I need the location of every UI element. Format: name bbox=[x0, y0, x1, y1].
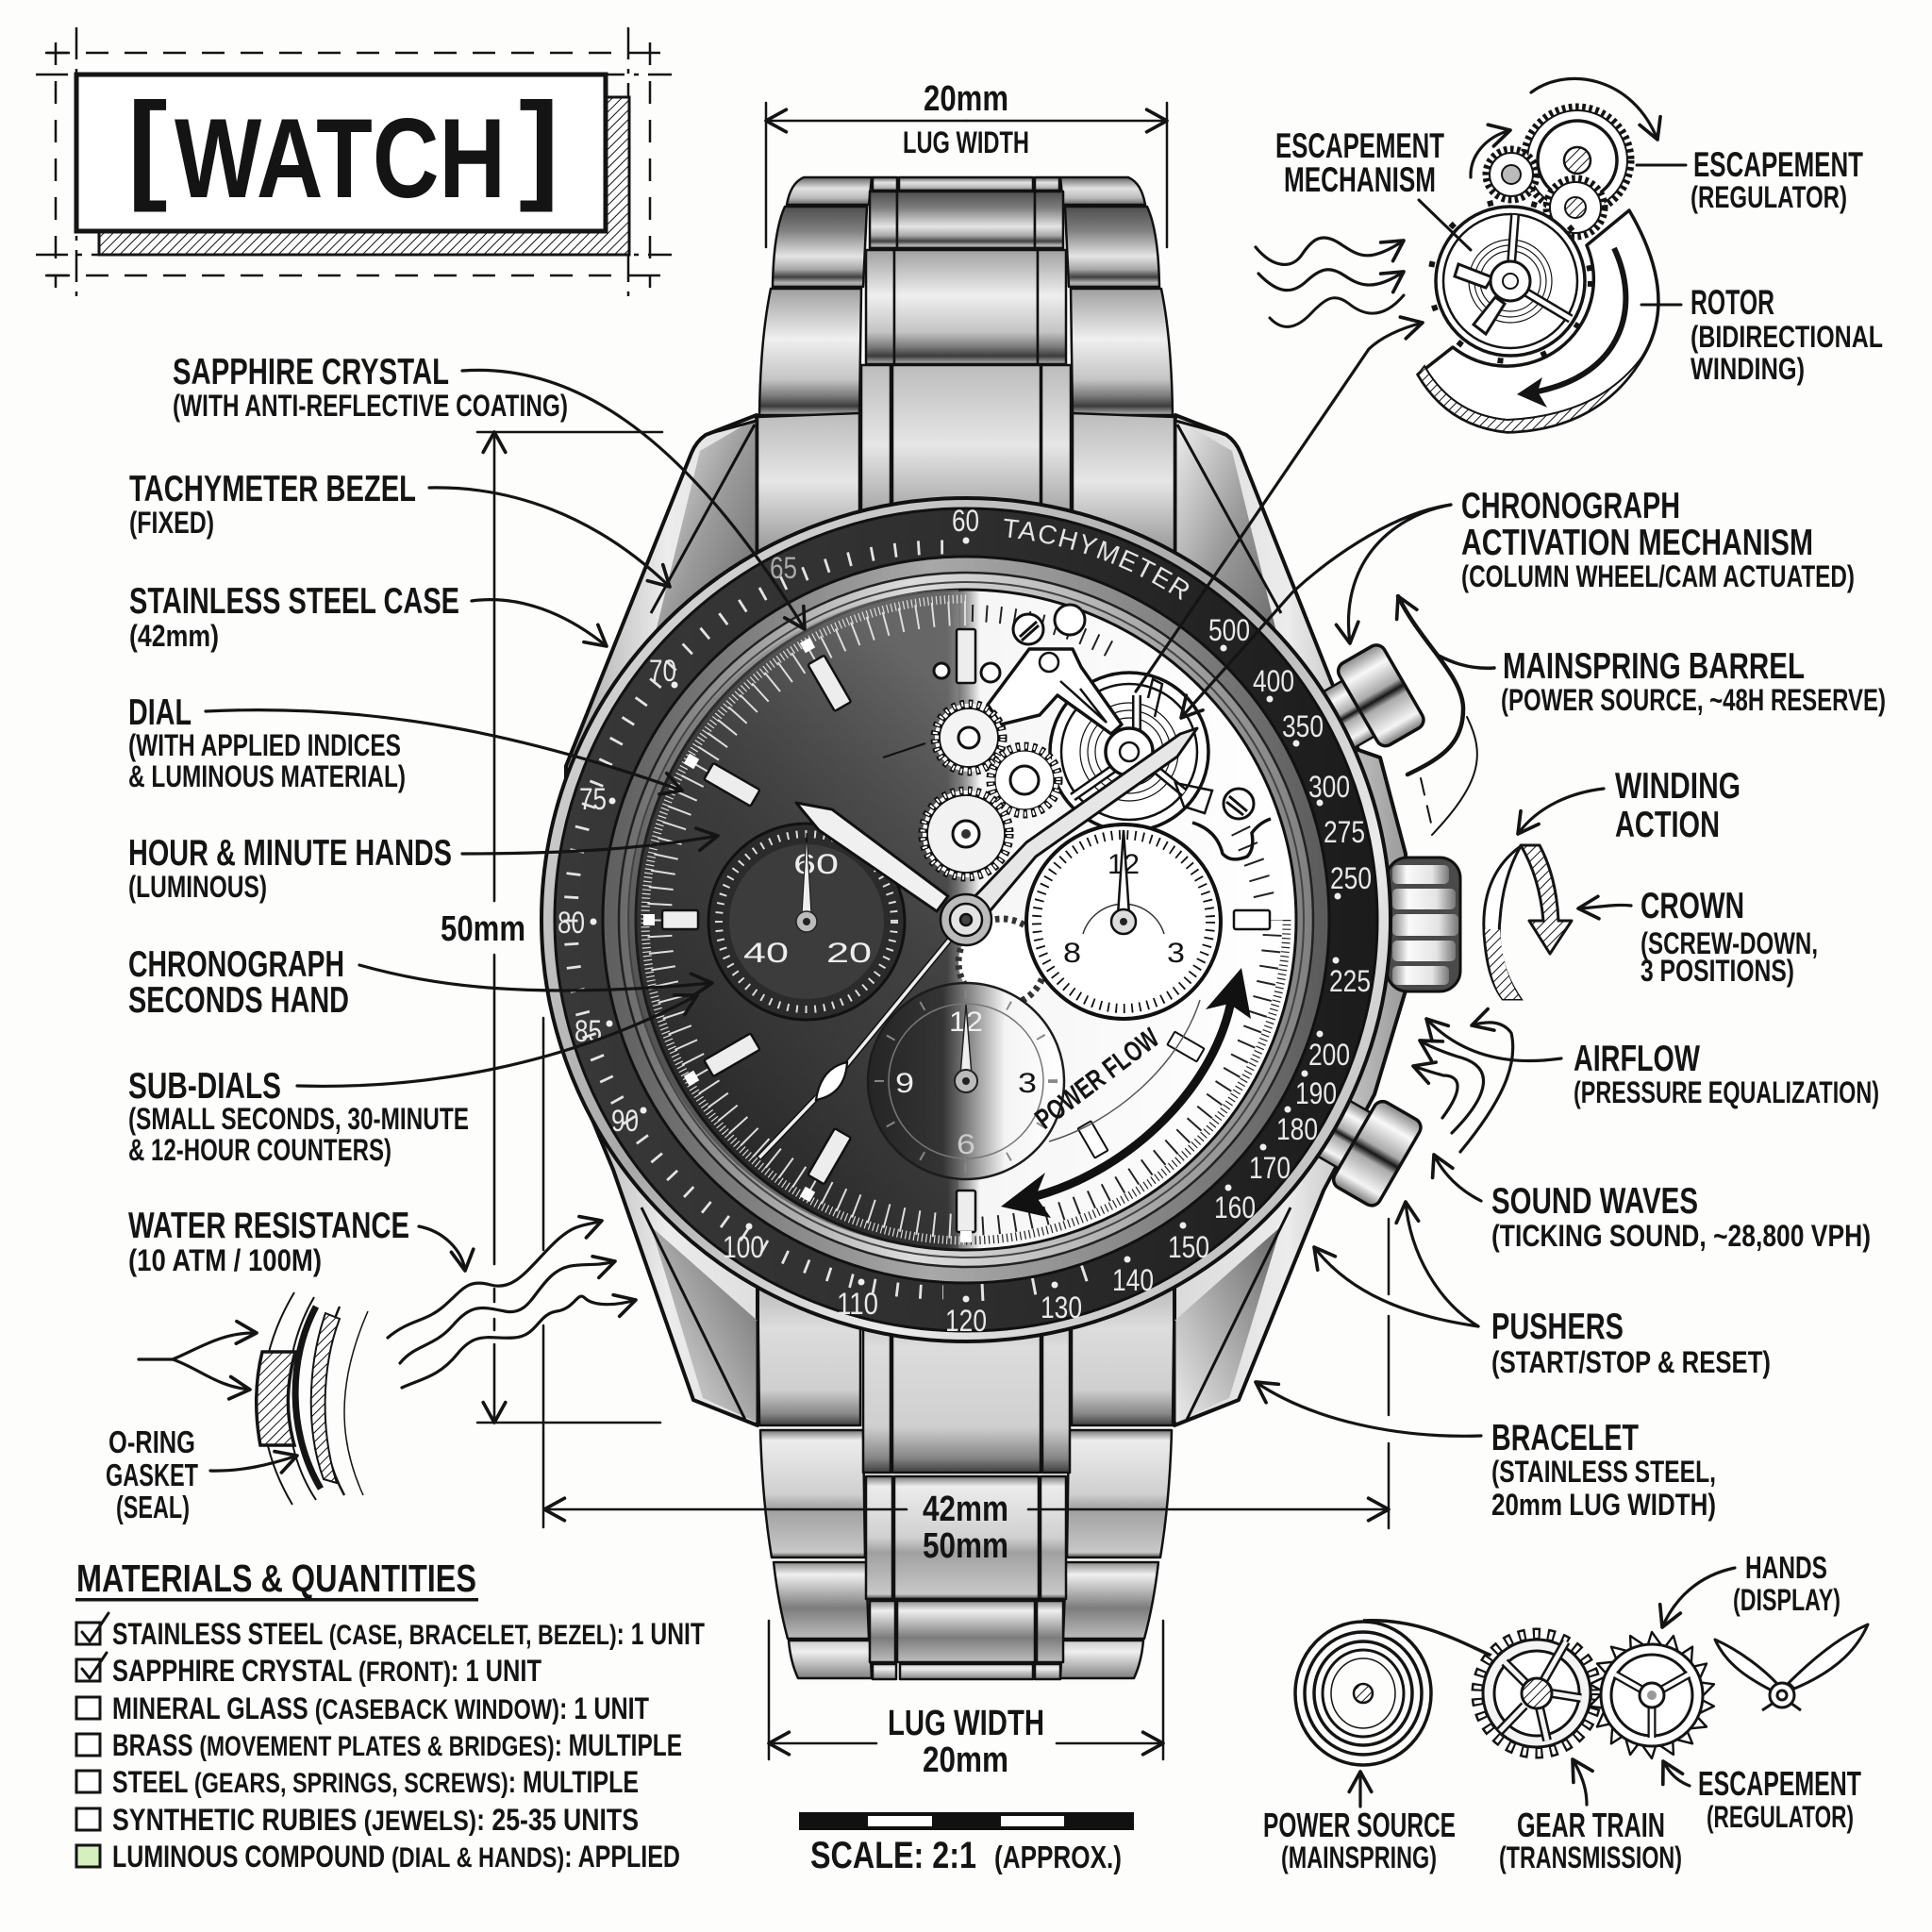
label: rotor: (BIDIRECTIONAL bbox=[1690, 320, 1883, 354]
leader from escapement to dial bbox=[1136, 323, 1423, 691]
dimension: lug width top bbox=[766, 79, 1167, 247]
luminous plots bbox=[643, 638, 972, 1242]
label: airflow bbox=[1413, 1019, 1879, 1152]
bezel word TACHYMETER: TACHYMETER bbox=[1004, 519, 1189, 600]
label: bracelet: BRACELET bbox=[1491, 1418, 1639, 1458]
balance wheel bbox=[1050, 673, 1208, 831]
bezel numbers: 300 bbox=[1308, 770, 1350, 804]
label: gear train bbox=[1499, 1759, 1682, 1874]
bezel black ring bbox=[555, 508, 1377, 1331]
scale label: (APPROX.) bbox=[994, 1840, 1122, 1874]
label: crown: CROWN bbox=[1641, 886, 1744, 926]
gasket cross-section bbox=[139, 1292, 368, 1505]
label: chronograph seconds hand: SECONDS HAND bbox=[128, 980, 349, 1021]
gasket case arcs bbox=[262, 1292, 368, 1505]
label: tachymeter bezel: TACHYMETER BEZEL bbox=[129, 469, 416, 509]
bezel numbers: 80 bbox=[558, 906, 585, 940]
label: crown: (SCREW-DOWN, bbox=[1641, 926, 1818, 960]
checkbox row 6: SYNTHETIC RUBIES (JEWELS): 25-35 UNITS bbox=[112, 1803, 639, 1837]
bezel numbers: 65 bbox=[770, 551, 797, 585]
sub-dial bottom: 12-hour counter: 3 bbox=[1018, 1068, 1037, 1099]
dial minute track bbox=[645, 599, 1287, 1241]
label: bracelet bbox=[1256, 1382, 1716, 1522]
label: pushers: PUSHERS bbox=[1491, 1307, 1624, 1347]
minute hand bbox=[966, 728, 1197, 923]
checkbox row 3: MINERAL GLASS (CASEBACK WINDOW): 1 UNIT bbox=[112, 1691, 649, 1725]
case body with lugs bbox=[566, 415, 1406, 1425]
bezel numbers: 200 bbox=[1308, 1038, 1350, 1072]
dimension: 42mm width bbox=[543, 1018, 1389, 1566]
upper pusher bbox=[1312, 641, 1427, 762]
label: tachymeter bezel bbox=[129, 469, 670, 587]
stainless steel case bbox=[566, 415, 1406, 1425]
bridge detail bbox=[1040, 653, 1212, 813]
label: o-ring gasket: (SEAL) bbox=[116, 1490, 190, 1524]
train gears bbox=[923, 704, 1058, 1006]
label: sapphire crystal: (WITH ANTI-REFLECTIVE COATING) bbox=[173, 389, 568, 423]
sub-dial left: small seconds: 40 bbox=[743, 938, 789, 969]
large gear bbox=[1524, 107, 1631, 214]
dial shade bbox=[628, 590, 958, 1250]
label: escapement mechanism bbox=[1275, 126, 1471, 250]
label: bracelet: 20mm LUG WIDTH) bbox=[1491, 1488, 1716, 1522]
label: water resistance: WATER RESISTANCE bbox=[128, 1206, 409, 1246]
label: mainspring barrel: MAINSPRING BARREL bbox=[1503, 646, 1805, 687]
sub-dial left: small seconds bbox=[708, 824, 905, 1020]
label: power source: POWER SOURCE bbox=[1263, 1806, 1456, 1844]
hour indices bbox=[662, 629, 1270, 1232]
dial hairline bbox=[883, 743, 925, 758]
sub-dial bottom: 12-hour counter: 9 bbox=[895, 1068, 914, 1099]
bezel numbers: 500 bbox=[1208, 613, 1250, 647]
bezel numbers: 170 bbox=[1249, 1151, 1291, 1185]
title box bbox=[76, 75, 606, 231]
screws bbox=[934, 605, 1254, 819]
label: escapement regulator: (REGULATOR) bbox=[1690, 180, 1847, 214]
upper bracelet bbox=[758, 177, 1174, 566]
lower outer links right bbox=[1060, 1264, 1174, 1678]
checkbox row 7: LUMINOUS COMPOUND (DIAL & HANDS): APPLIED bbox=[112, 1840, 680, 1874]
dimension text 42mm: 42mm bbox=[923, 1490, 1008, 1529]
label: escapement mechanism: MECHANISM bbox=[1284, 160, 1436, 199]
bezel numbers: 190 bbox=[1295, 1076, 1337, 1110]
label: power train escapement: (REGULATOR) bbox=[1707, 1800, 1854, 1834]
label: dial: (WITH APPLIED INDICES bbox=[128, 728, 401, 762]
label: hour and minute hands bbox=[128, 833, 718, 904]
bezel numbers: 85 bbox=[575, 1014, 602, 1048]
label: gear train: (TRANSMISSION) bbox=[1499, 1840, 1682, 1874]
label: escapement regulator: ESCAPEMENT bbox=[1693, 145, 1863, 184]
case facet lines bbox=[641, 415, 1291, 1425]
bezel numbers: 160 bbox=[1214, 1191, 1256, 1224]
bezel numbers: 180 bbox=[1276, 1112, 1318, 1146]
lower centre links bbox=[863, 1264, 1070, 1679]
rehaut bbox=[619, 573, 1313, 1267]
label: sub-dials: SUB-DIALS bbox=[128, 1066, 281, 1107]
title text: ] bbox=[519, 78, 559, 213]
dial base with dark and skeleton halves bbox=[636, 590, 1296, 1250]
inner chapter ring bbox=[603, 557, 1329, 1283]
sub-dial left: small seconds: 20 bbox=[826, 938, 872, 969]
label: rotor bbox=[1641, 283, 1883, 386]
sub-dial right: 30-minute counter bbox=[1026, 824, 1221, 1019]
rotor direction arrow bbox=[1517, 248, 1625, 408]
checkbox row 5: STEEL (GEARS, SPRINGS, SCREWS): MULTIPLE bbox=[112, 1765, 639, 1799]
dimension: 50mm height bbox=[441, 432, 662, 1423]
display hands bbox=[1715, 1624, 1868, 1710]
label: chronograph seconds hand: CHRONOGRAPH bbox=[128, 944, 344, 985]
transmission gear bbox=[1477, 1634, 1596, 1753]
bezel tick marks bbox=[571, 547, 1108, 1292]
bezel metal rim bbox=[541, 498, 1391, 1341]
balance wheel bbox=[1430, 201, 1591, 361]
label: chronograph activation mechanism bbox=[1181, 486, 1855, 718]
label: sub-dials bbox=[128, 995, 697, 1167]
sub-dial right: 30-minute counter: 12 bbox=[1108, 849, 1140, 880]
sub-dial bottom: 12-hour counter bbox=[868, 983, 1064, 1179]
bezel numbers: 275 bbox=[1324, 815, 1365, 849]
cock bridge bbox=[988, 649, 1122, 734]
incoming waves bbox=[1256, 238, 1404, 326]
label: chronograph activation mechanism: ACTIVATION MECHANISM bbox=[1461, 523, 1813, 563]
bezel numbers: 140 bbox=[1112, 1263, 1154, 1297]
centre pivot bbox=[941, 894, 991, 945]
label: power source bbox=[1263, 1772, 1456, 1874]
label: winding action bbox=[1518, 766, 1740, 845]
gasket block bbox=[257, 1352, 295, 1445]
label: crown bbox=[1578, 886, 1818, 988]
label: sound waves: SOUND WAVES bbox=[1491, 1181, 1698, 1222]
rotor crescent bbox=[1418, 210, 1658, 432]
motion arrows on gears bbox=[1531, 78, 1657, 140]
sub-dial right: 30-minute counter: 8 bbox=[1063, 938, 1081, 969]
bezel numbers: 70 bbox=[649, 654, 676, 688]
upper right lug facet bbox=[1175, 418, 1281, 651]
bezel numbers bbox=[558, 504, 1372, 1338]
gasket arrows bbox=[139, 1333, 257, 1359]
bezel numbers: 100 bbox=[723, 1230, 764, 1264]
outer links left bbox=[758, 177, 872, 566]
bezel scale dots bbox=[591, 538, 1341, 1302]
label: hour and minute hands: (LUMINOUS) bbox=[128, 870, 267, 904]
label: tachymeter bezel: (FIXED) bbox=[129, 506, 214, 540]
label: o-ring gasket: O-RING bbox=[108, 1424, 195, 1459]
label: sub-dials: (SMALL SECONDS, 30-MINUTE bbox=[128, 1102, 469, 1136]
rotor hatched edge bbox=[1418, 351, 1646, 432]
hands bbox=[759, 728, 1197, 1158]
label: dial: & LUMINOUS MATERIAL) bbox=[128, 759, 406, 793]
label: sound waves bbox=[1434, 1155, 1871, 1253]
title block: [WATCH] bbox=[36, 27, 672, 304]
label: sapphire crystal bbox=[173, 352, 805, 629]
checklist heading: MATERIALS & QUANTITIES bbox=[76, 1557, 476, 1600]
label: dial bbox=[128, 692, 682, 793]
bezel numbers: 250 bbox=[1330, 861, 1372, 895]
label: chronograph seconds hand bbox=[128, 944, 712, 1021]
label: winding action: WINDING bbox=[1615, 766, 1740, 807]
power flow arrow bbox=[1001, 968, 1251, 1218]
lower bracelet bbox=[758, 1264, 1174, 1679]
gasket seal band bbox=[311, 1313, 340, 1483]
label: stainless steel case bbox=[129, 581, 607, 653]
bezel numbers: 90 bbox=[611, 1104, 639, 1138]
mainspring coil bbox=[1295, 1621, 1496, 1765]
label: sapphire crystal: SAPPHIRE CRYSTAL bbox=[173, 352, 449, 392]
label: winding action: ACTION bbox=[1615, 805, 1720, 845]
upper left lug facet bbox=[651, 418, 757, 651]
label: hour and minute hands: HOUR & MINUTE HANDS bbox=[128, 833, 452, 874]
checkbox row 1: STAINLESS STEEL (CASE, BRACELET, BEZEL): 1 UNIT bbox=[112, 1617, 705, 1651]
checkbox row 2: SAPPHIRE CRYSTAL (FRONT): 1 UNIT bbox=[112, 1654, 541, 1688]
label: sub-dials: & 12-HOUR COUNTERS) bbox=[128, 1133, 391, 1167]
lug width bottom text: LUG WIDTH bbox=[888, 1704, 1044, 1743]
dial bbox=[628, 590, 1296, 1250]
small gear motion arrow bbox=[1471, 130, 1510, 177]
escapement and rotor diagram bbox=[1136, 78, 1658, 691]
bezel numbers: 75 bbox=[579, 782, 607, 816]
lower pusher bbox=[1307, 1085, 1424, 1209]
bezel numbers: 60 bbox=[952, 504, 979, 538]
label: water resistance: (10 ATM / 100M) bbox=[128, 1243, 322, 1277]
bezel numbers: 400 bbox=[1253, 664, 1294, 698]
dimension text 50mm height: 50mm bbox=[441, 909, 525, 949]
sub-dial bottom: 12-hour counter: 12 bbox=[949, 1007, 983, 1038]
label: water resistance bbox=[128, 1206, 465, 1277]
bezel numbers: 120 bbox=[945, 1304, 987, 1338]
label: mainspring barrel bbox=[1398, 596, 1886, 835]
label: chronograph activation mechanism: CHRONOGRAPH bbox=[1461, 486, 1680, 526]
winding action ribbon arrow bbox=[1484, 845, 1572, 999]
lower right lug facet bbox=[1174, 1226, 1281, 1423]
lower outer links left bbox=[758, 1264, 872, 1678]
dimension text 50mm width: 50mm bbox=[923, 1526, 1008, 1566]
title text: [ bbox=[127, 78, 168, 213]
label: gear train: GEAR TRAIN bbox=[1517, 1806, 1665, 1844]
small gear left bbox=[1486, 149, 1537, 200]
water flow arrows bbox=[388, 1221, 636, 1388]
label: escapement regulator bbox=[1637, 145, 1863, 214]
checkbox row 4: BRASS (MOVEMENT PLATES & BRIDGES): MULTIPLE bbox=[112, 1728, 682, 1762]
outer links right bbox=[1060, 177, 1174, 566]
label: crown: 3 POSITIONS) bbox=[1641, 954, 1794, 988]
lug width bottom value: 20mm bbox=[923, 1740, 1008, 1780]
dimension: lug width bottom bbox=[769, 1621, 1163, 1780]
dimension text 20mm: 20mm bbox=[924, 79, 1008, 119]
label: airflow: AIRFLOW bbox=[1574, 1039, 1700, 1079]
title construction lines bbox=[36, 27, 672, 304]
label: escapement mechanism: ESCAPEMENT bbox=[1275, 126, 1444, 165]
label: pushers bbox=[1314, 1202, 1771, 1379]
title text: WATCH bbox=[175, 95, 506, 222]
bezel numbers: 350 bbox=[1282, 709, 1324, 743]
scale bar bbox=[799, 1812, 1134, 1876]
bezel numbers: 110 bbox=[837, 1287, 878, 1321]
crown bbox=[1387, 858, 1460, 991]
power flow label: POWER FLOW bbox=[1029, 1023, 1165, 1136]
rehaut inner line bbox=[628, 582, 1304, 1257]
title shadow hatch bbox=[99, 97, 629, 255]
hour hand bbox=[796, 803, 948, 911]
bezel numbers: 225 bbox=[1329, 964, 1371, 998]
label: rotor: ROTOR bbox=[1690, 283, 1774, 322]
small gear right bbox=[1546, 178, 1605, 237]
tachymeter bezel bbox=[540, 496, 1392, 1343]
scale label: SCALE: 2:1 bbox=[810, 1835, 976, 1876]
centre links bbox=[861, 177, 1071, 544]
chronograph seconds hand bbox=[759, 920, 966, 1158]
plate contour bbox=[1192, 819, 1271, 859]
label: o-ring gasket: GASKET bbox=[106, 1457, 198, 1492]
label: pushers: (START/STOP & RESET) bbox=[1491, 1345, 1771, 1379]
bezel numbers: 150 bbox=[1168, 1230, 1209, 1264]
dimension text lug width: LUG WIDTH bbox=[903, 125, 1029, 159]
label: power train escapement bbox=[1663, 1761, 1861, 1834]
label: hands display: HANDS bbox=[1745, 1550, 1827, 1585]
label: bracelet: (STAINLESS STEEL, bbox=[1491, 1455, 1716, 1489]
bezel numbers: 130 bbox=[1041, 1291, 1082, 1324]
label: power source: (MAINSPRING) bbox=[1281, 1840, 1437, 1874]
power train diagram bbox=[1295, 1621, 1868, 1765]
skeleton movement bbox=[883, 605, 1271, 1006]
sub-dial right: 30-minute counter: 3 bbox=[1167, 938, 1185, 969]
lower left lug facet bbox=[651, 1226, 758, 1423]
label: hands display bbox=[1662, 1550, 1840, 1627]
label: o-ring gasket bbox=[106, 1424, 198, 1524]
label: power train escapement: ESCAPEMENT bbox=[1698, 1764, 1861, 1803]
materials and quantities checklist bbox=[75, 1557, 705, 1874]
label: dial: DIAL bbox=[128, 692, 192, 733]
escape wheel bbox=[1588, 1632, 1716, 1758]
label: stainless steel case: (42mm) bbox=[129, 619, 219, 653]
sub-dial left: small seconds: 60 bbox=[793, 849, 839, 880]
label: stainless steel case: STAINLESS STEEL CASE bbox=[129, 581, 459, 622]
sub-dial bottom: 12-hour counter: 6 bbox=[957, 1129, 975, 1160]
label: hands display: (DISPLAY) bbox=[1733, 1583, 1840, 1617]
label: rotor: WINDING) bbox=[1690, 352, 1805, 386]
